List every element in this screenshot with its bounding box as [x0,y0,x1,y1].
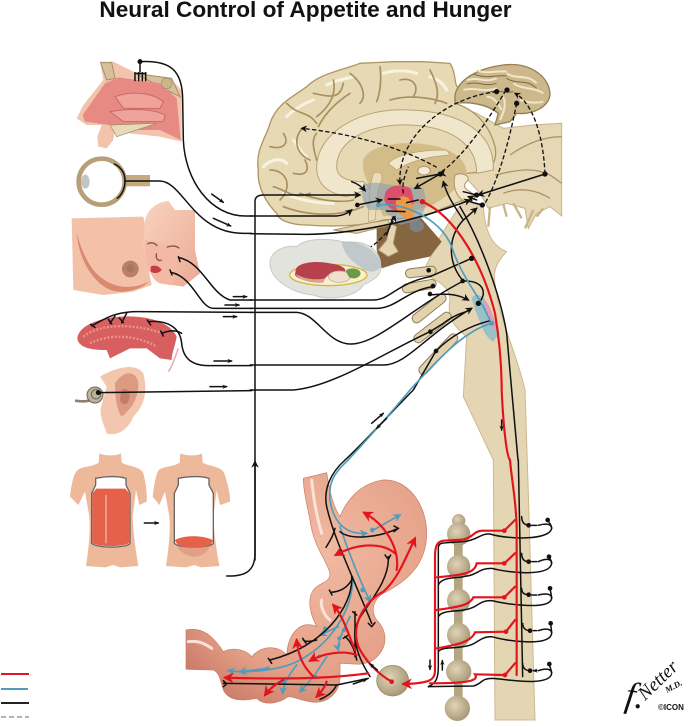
signature [623,656,684,717]
panel: stomach and gut innervation [186,460,553,721]
thalamus region [363,143,467,217]
hypothalamus nuclei [384,186,413,212]
stomach and intestine [186,473,427,703]
celiac ganglion [377,665,409,696]
blue gastric fibers [228,460,400,693]
pituitary stalk [333,220,398,257]
small direction arrows [353,660,442,684]
panel: sensory organs [72,59,252,434]
panel: brain and spinal cord [250,62,562,720]
legend lines [1,673,29,717]
arrow between torsos [144,521,158,525]
nose cross section [77,59,182,148]
occipital region [450,103,562,228]
ear with cochlea [75,367,252,434]
cerebrum [258,62,496,226]
signature: f. [623,674,647,717]
dashed projections [302,92,545,248]
cerebellar folds [463,70,543,120]
nerves: red efferent fiber [420,199,510,460]
medullary nucleus halo [472,295,499,342]
neuron dots [355,87,548,353]
tongue [77,312,252,372]
signature: Netter [633,656,683,705]
ascending gastric signal arrow [227,462,255,576]
dark cerebellar region [377,217,442,268]
spinal cord and brainstem [423,200,535,720]
vagus direction arrows [372,413,502,430]
inner brainstem curve [454,174,475,202]
intestinal highlights [188,480,330,648]
food thought cloud [270,239,381,298]
gyri folds [263,67,562,214]
fornix [388,150,450,170]
olfactory nerve endings [135,59,146,81]
signature: ©ICON [658,703,684,712]
panel: stomach fullness torsos [70,453,255,576]
corpus callosum arc [317,110,493,197]
eye cross section [79,159,150,205]
white matter branches [488,203,543,228]
nerve traces from nose and eye [125,61,252,233]
red gastric and sympathetic fibers [225,460,517,697]
full torso [70,453,147,567]
empty torso [153,453,230,567]
signature: M.D. [662,678,684,695]
black gastric fibers [223,460,553,699]
brainstem roots [407,271,453,370]
small direction arrows [210,194,247,387]
hypothalamus halo [362,183,427,225]
spinal cord dorsal fiber [518,460,523,677]
cerebellum [455,65,550,125]
nerves: blue vagal sensory fibers [348,203,494,460]
nerves: sensory inputs [250,174,545,560]
sympathetic chain [445,514,471,721]
baby nursing at breast [72,201,252,308]
